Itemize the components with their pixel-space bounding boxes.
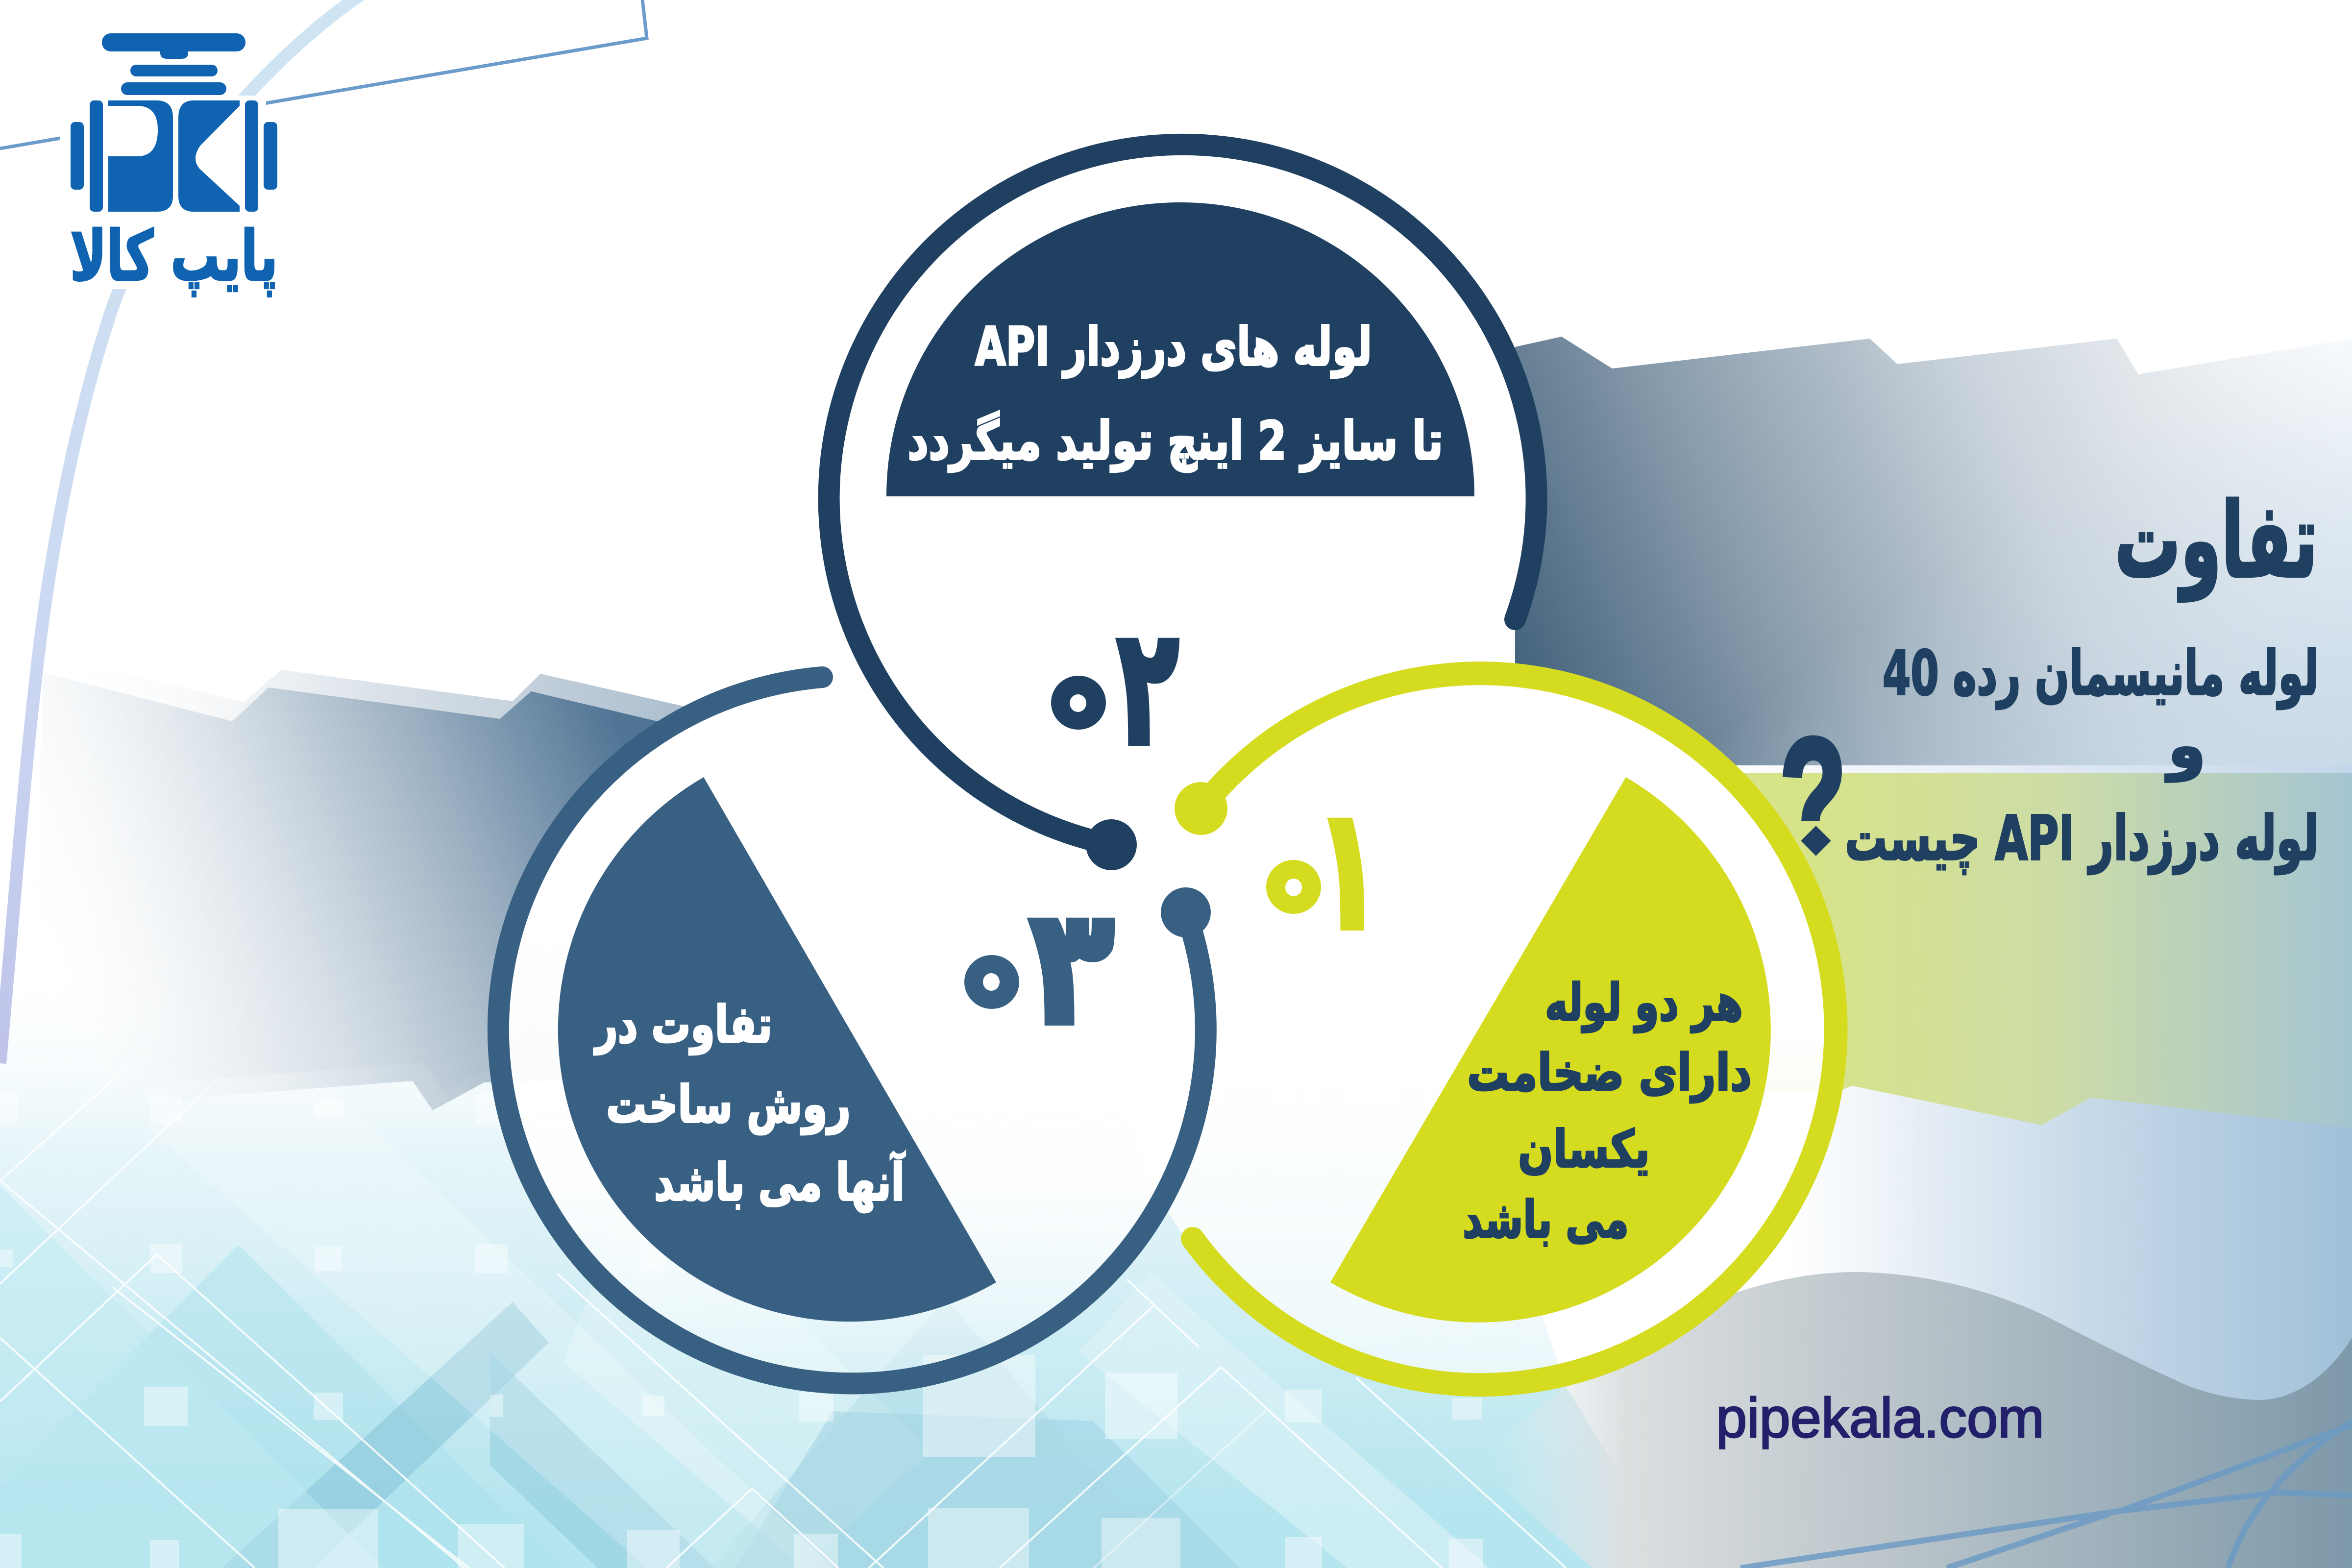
- number 01: ۱: [1319, 777, 1378, 962]
- background: top right gradient band: [1515, 337, 2352, 774]
- connector dot 03: [1161, 887, 1211, 937]
- text 02: لوله های درزدار API: [975, 317, 1372, 378]
- question mark: [1783, 735, 1842, 856]
- circle interiors: [499, 140, 1830, 1387]
- number 03: [964, 874, 1114, 1060]
- background: teal geometric pattern: [0, 956, 1666, 1568]
- conjunction: و: [2165, 710, 2206, 782]
- number 03: ۳: [1029, 874, 1114, 1060]
- connector dot 02: [1086, 819, 1137, 870]
- background: grey wave: [1472, 1272, 2352, 1568]
- background: thin frame line: [0, 0, 647, 148]
- half disc 01: [1330, 777, 1771, 1323]
- background: curved pale arc: [0, 0, 360, 1063]
- number 01: [1266, 777, 1378, 962]
- text 02: تا سایز 2 اینچ تولید میگردد: [907, 411, 1443, 472]
- text 01: دارای ضخامت: [1467, 1043, 1752, 1102]
- background: lower right gradient: [1470, 1078, 2352, 1568]
- text 03: روش ساخت: [606, 1075, 851, 1135]
- logo: پایپ کالا: [70, 217, 278, 297]
- text 03: [593, 995, 906, 1212]
- number 03: ۰: [981, 946, 1017, 1014]
- text 01: یکسان: [1518, 1119, 1650, 1179]
- ring 02: [829, 145, 1537, 845]
- text 01: هر دو لوله: [1545, 973, 1743, 1033]
- background: left gradient band: [29, 655, 690, 1110]
- text 03: تفاوت در: [593, 995, 772, 1055]
- circle 01: [1175, 673, 1836, 1385]
- number 02: [1051, 594, 1178, 780]
- question mark: ?: [1780, 705, 1846, 891]
- half disc 02: [886, 202, 1474, 496]
- circle 02: [829, 145, 1537, 870]
- background: green band: [1568, 773, 2352, 1128]
- website url: pipekala.com: [1716, 1387, 2044, 1449]
- circle 03: [498, 677, 1211, 1383]
- logo: [60, 33, 278, 297]
- text 03: آنها می باشد: [654, 1151, 906, 1212]
- half disc 03: [558, 777, 996, 1322]
- ring 03: [498, 677, 1206, 1383]
- text 02: [907, 317, 1443, 472]
- number 02: ۰: [1068, 666, 1104, 735]
- background: bottom right blue lines: [1740, 1421, 2352, 1568]
- ring 01: [1193, 673, 1836, 1385]
- number 01: ۰: [1283, 851, 1319, 919]
- number 02: ۲: [1117, 594, 1178, 780]
- heading block: [1780, 481, 2319, 891]
- text 01: می باشد: [1463, 1190, 1629, 1250]
- connector dot 01: [1175, 782, 1227, 835]
- text 01: [1463, 973, 1752, 1250]
